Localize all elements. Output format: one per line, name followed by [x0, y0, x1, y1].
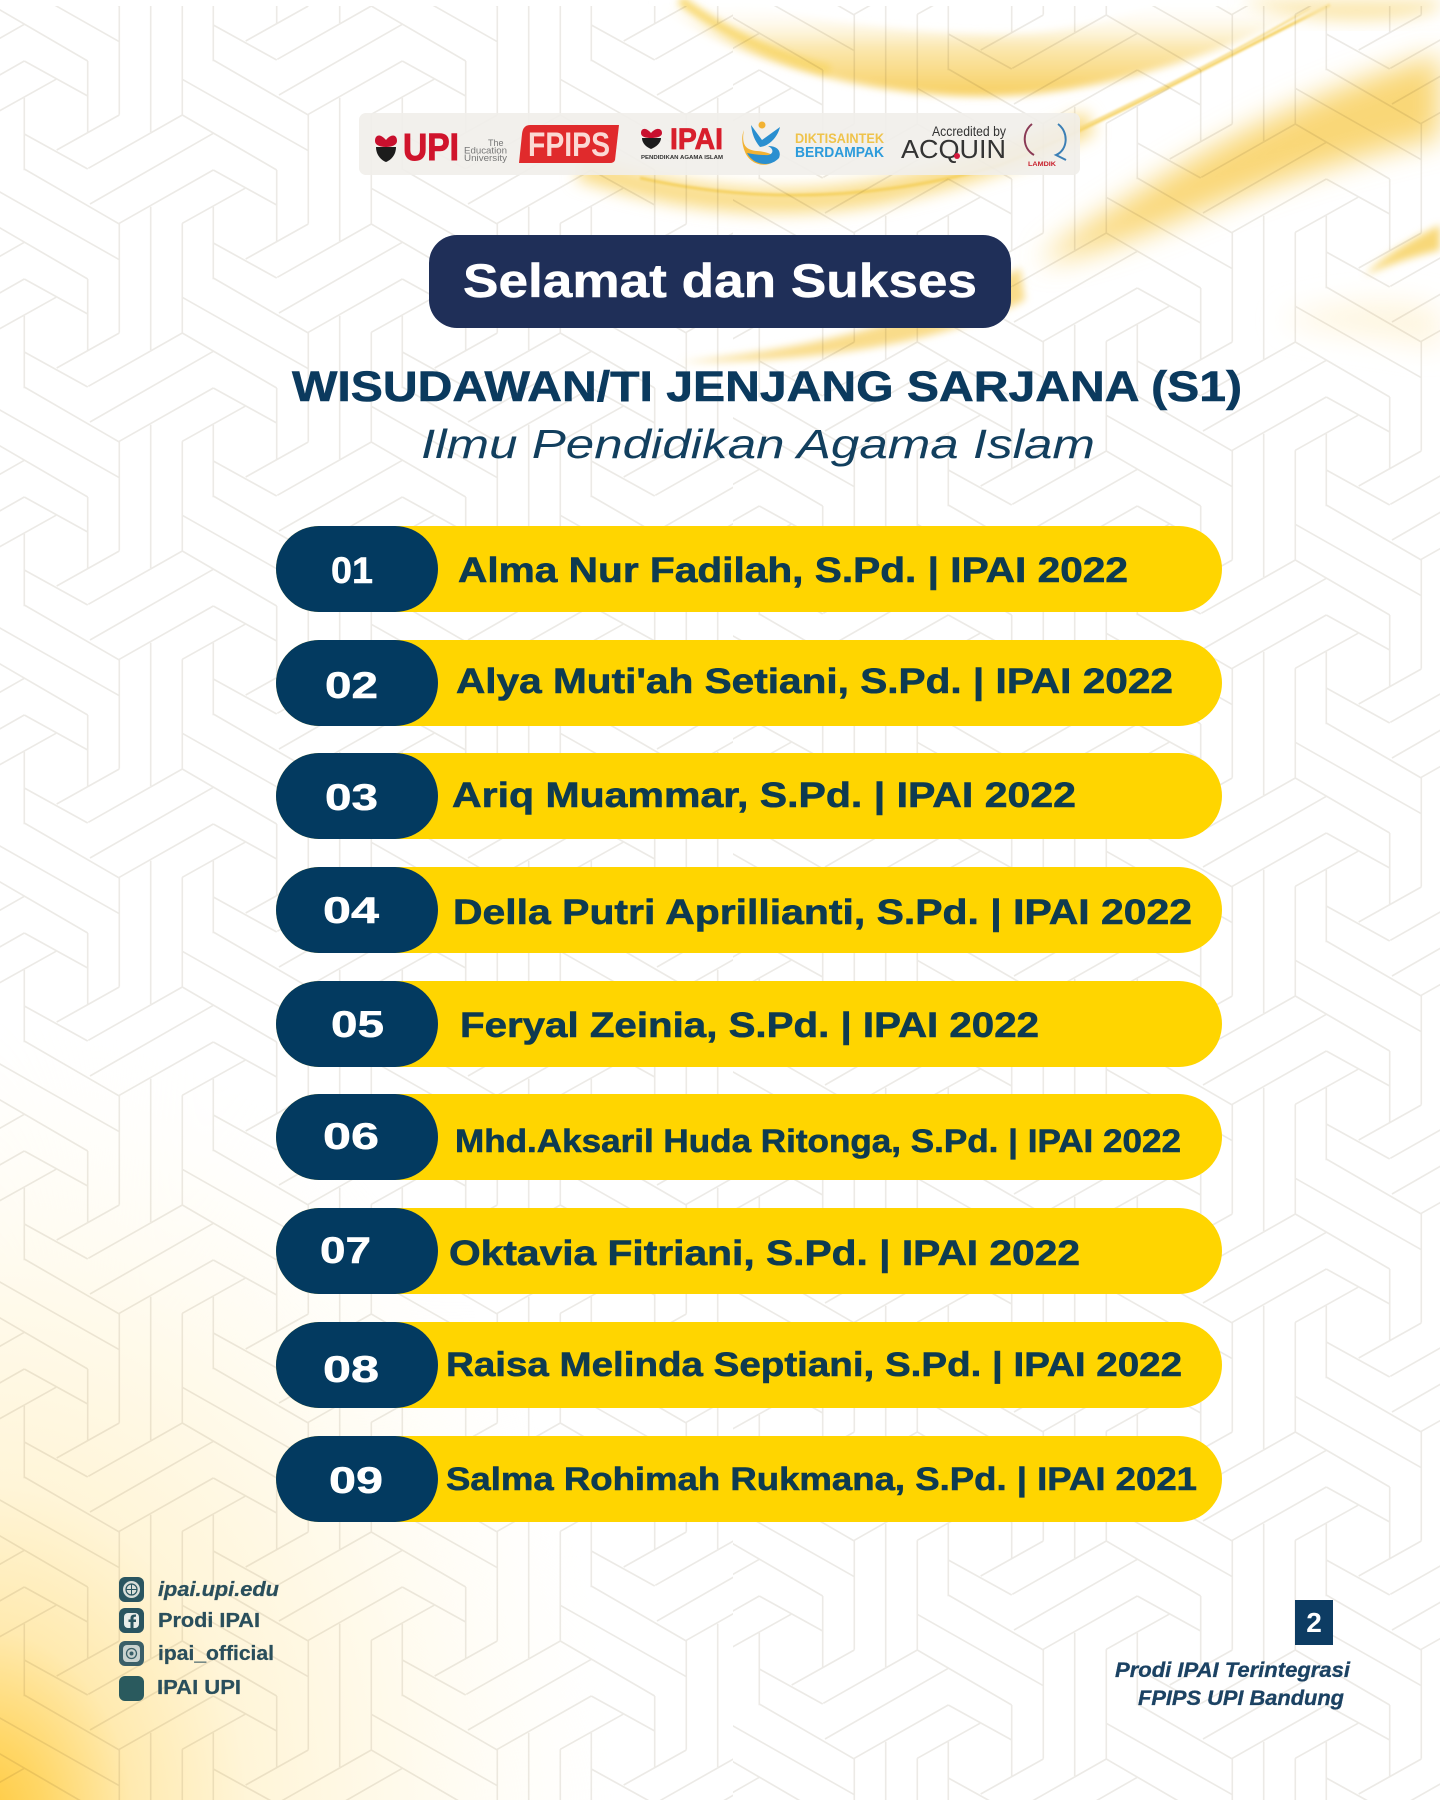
background: gold corner glow [0, 1020, 660, 1800]
heading badge: Selamat dan Sukses: Selamat dan Sukses [463, 254, 977, 307]
icon: UPI emblem [375, 136, 397, 162]
icon: youtube square [119, 1676, 144, 1701]
row 07 [276, 1208, 1222, 1294]
footer credit: FPIPS UPI Bandung [1138, 1687, 1344, 1710]
row 02: Alya Muti'ah Setiani, S.Pd. | IPAI 2022 [456, 662, 1173, 701]
logo strip [359, 113, 1080, 175]
row 01: 01 [331, 550, 373, 591]
row 06 [276, 1094, 1222, 1180]
icon: LAMDIK Q logo: LAMDIK [1028, 162, 1057, 168]
subtitle: Ilmu Pendidikan Agama Islam: Ilmu Pendidikan Agama Islam [421, 421, 1095, 467]
row 08: Raisa Melinda Septiani, S.Pd. | IPAI 2022 [446, 1346, 1182, 1384]
background: gold waves top right [580, 0, 1440, 362]
link: youtube: IPAI UPI [157, 1677, 241, 1699]
row 08: 08 [323, 1349, 379, 1390]
subtitle: Wisudawan/ti jenjang sarjana: WISUDAWAN/TI JENJANG SARJANA (S1) [292, 363, 1242, 411]
link: facebook: Prodi IPAI [158, 1610, 260, 1632]
row 03 [276, 753, 1222, 839]
link: website: ipai.upi.edu [158, 1579, 279, 1601]
logo text: Ilmu Pendidikan Agama Islam: PENDIDIKAN AGAMA ISLAM [641, 155, 723, 161]
row 01: Alma Nur Fadilah, S.Pd. | IPAI 2022 [458, 551, 1128, 590]
row 01 [276, 526, 1222, 612]
footer credit [1115, 1659, 1351, 1710]
row 04: 04 [323, 890, 380, 931]
row 05 [276, 981, 1222, 1067]
icon: website [119, 1577, 144, 1602]
icon: LAMDIK Q logo [1025, 124, 1066, 168]
row 02: 02 [325, 665, 378, 706]
logo text: UPI: UPI [403, 127, 459, 169]
row 05: Feryal Zeinia, S.Pd. | IPAI 2022 [460, 1006, 1039, 1045]
row 09: 09 [329, 1460, 383, 1501]
row 04: Della Putri Aprillianti, S.Pd. | IPAI 2022 [453, 893, 1192, 932]
link: instagram: ipai_official [158, 1643, 274, 1665]
row 03: 03 [325, 777, 378, 818]
footer credit: Prodi IPAI Terintegrasi [1115, 1659, 1351, 1682]
logo: FPIPS: FPIPS [528, 126, 610, 164]
icon: facebook [119, 1608, 144, 1633]
icon: IPAI emblem [641, 129, 662, 149]
logo text: The Education University: The [488, 138, 504, 148]
logo text: IPAI: IPAI [670, 123, 723, 156]
row 04 [276, 867, 1222, 953]
page number [1295, 1600, 1333, 1645]
icon: instagram [119, 1641, 144, 1666]
logo text: Accredited by ACQUIN: ACQUIN [901, 134, 1006, 164]
logo text: The Education University: University [464, 153, 508, 163]
logo text: Diktisaintek Berdampak [795, 130, 884, 161]
logo text: Diktisaintek Berdampak: BERDAMPAK [795, 145, 884, 161]
row 02 [276, 640, 1222, 726]
logo text: The Education University: Education [464, 146, 507, 156]
row 06: 06 [323, 1116, 379, 1157]
icon: Diktisaintek logo [742, 122, 780, 165]
logo text: Diktisaintek Berdampak: DIKTISAINTEK [795, 130, 884, 146]
social links [119, 1577, 279, 1701]
logo text: Accredited by ACQUIN: Accredited by [932, 123, 1006, 139]
row 08 [276, 1322, 1222, 1408]
row 09: Salma Rohimah Rukmana, S.Pd. | IPAI 2021 [446, 1461, 1197, 1497]
row 07: Oktavia Fitriani, S.Pd. | IPAI 2022 [449, 1234, 1080, 1273]
row 05: 05 [331, 1004, 384, 1045]
page number: 2 [1306, 1607, 1322, 1638]
row 07: 07 [320, 1230, 371, 1271]
heading badge: Selamat dan Sukses [429, 235, 1011, 328]
row 03: Ariq Muammar, S.Pd. | IPAI 2022 [452, 776, 1076, 815]
row 06: Mhd.Aksaril Huda Ritonga, S.Pd. | IPAI 2022 [455, 1123, 1181, 1159]
row 09 [276, 1436, 1222, 1522]
